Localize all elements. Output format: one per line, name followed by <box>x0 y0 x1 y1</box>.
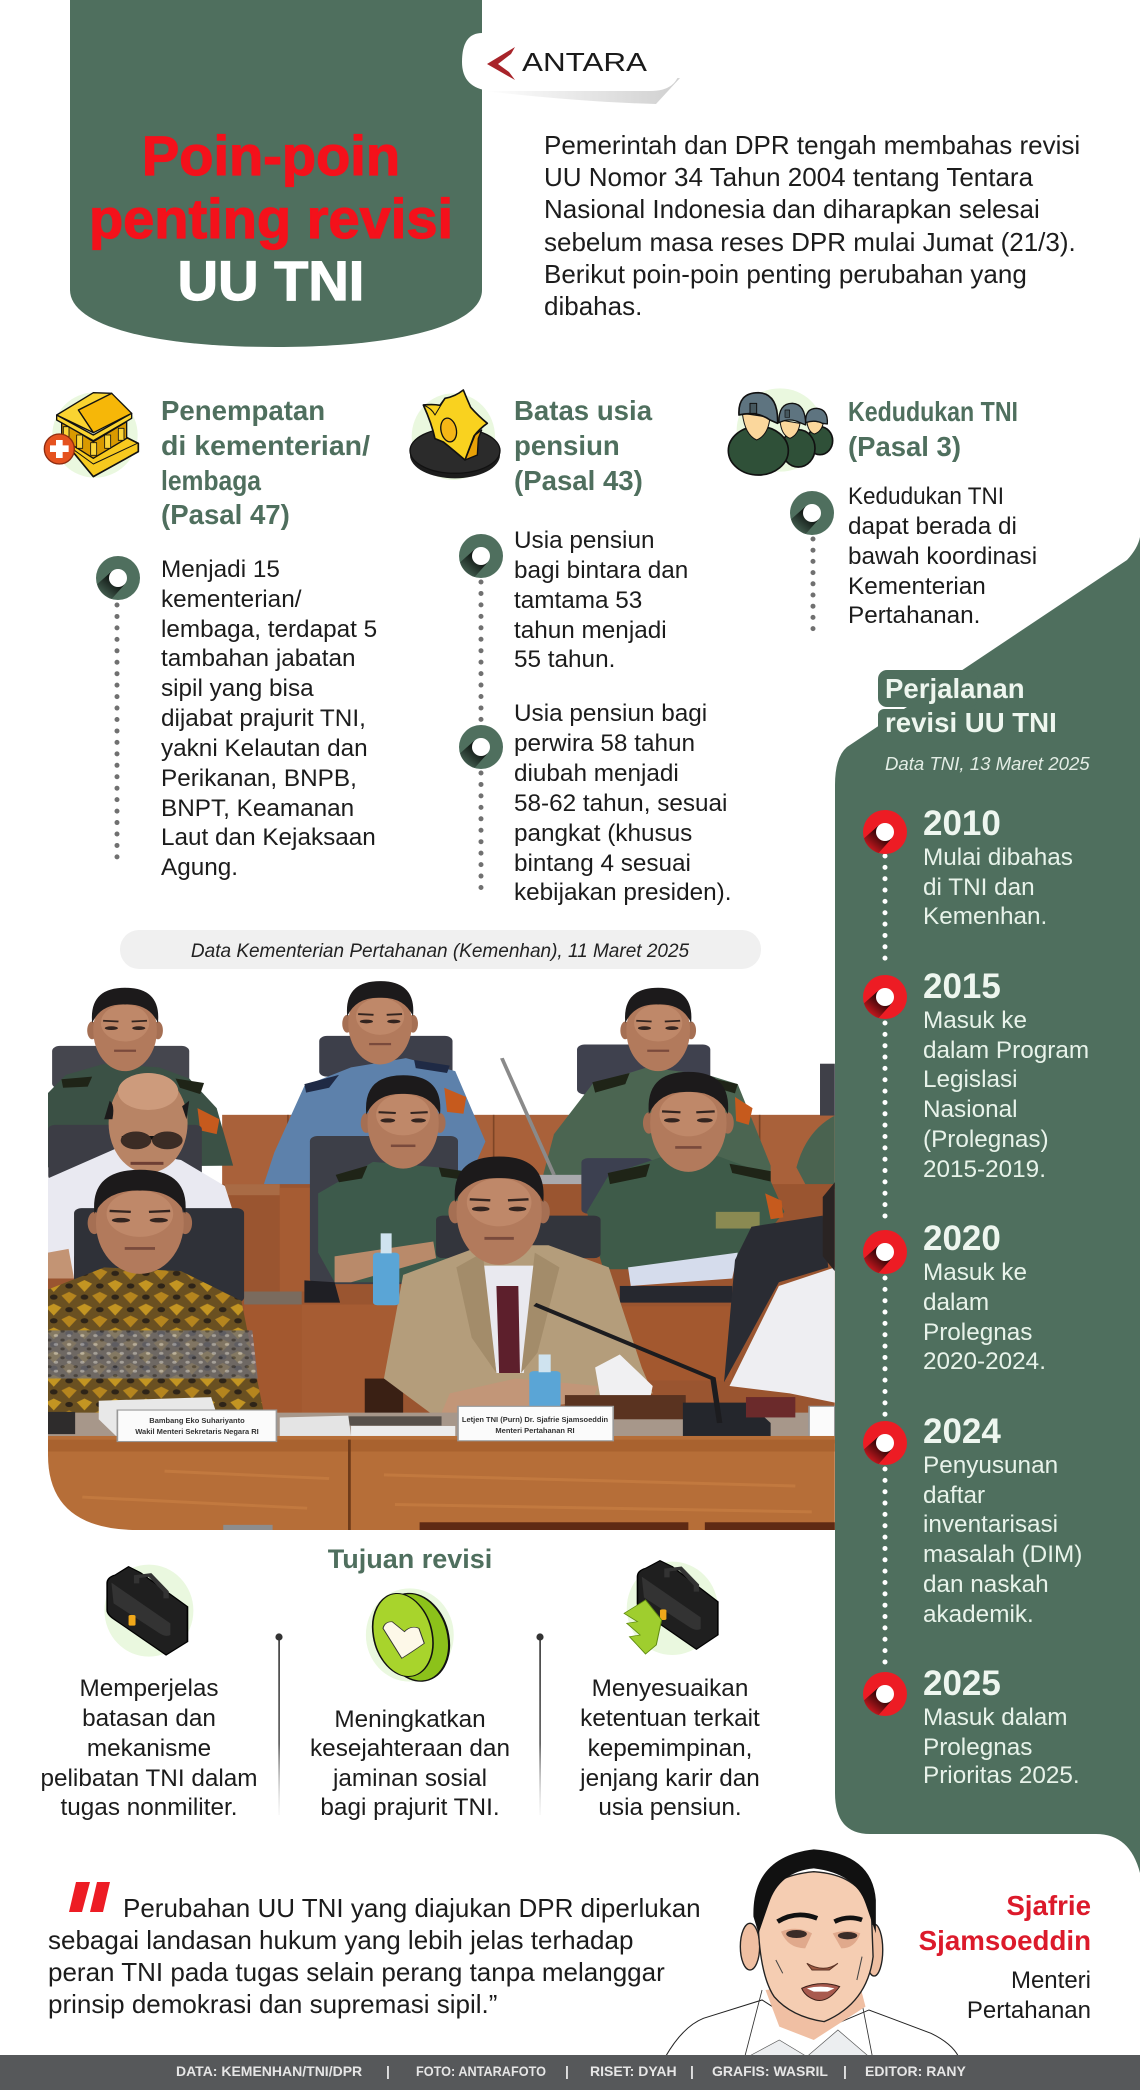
text block: bintara: 55 tahun. <box>514 646 615 673</box>
panel: kedudukan TNI <box>788 396 1037 629</box>
speaker name: Sjafrie <box>1006 1890 1091 1921</box>
heading: penempatan: lembaga <box>161 465 262 496</box>
heading: batas usia <box>514 395 653 496</box>
text block: introduction: dibahas. <box>544 291 642 321</box>
quote: sebagai landasan hukum yang lebih jelas terhadap <box>48 1925 633 1955</box>
text block: perwira: bintang 4 sesuai <box>514 850 691 877</box>
text block: bintara: tahun menjadi <box>514 617 667 644</box>
text block: goal three: usia pensiun. <box>598 1794 742 1821</box>
icon: soldiers <box>728 388 833 475</box>
heading: kedudukan: (Pasal 3) <box>848 431 961 462</box>
text block: introduction: Pemerintah dan DPR tengah membahas revisi <box>544 130 1080 160</box>
name plate left: Wakil Menteri Sekretaris Negara RI <box>135 1427 259 1436</box>
heading: penempatan: Penempatan <box>161 395 325 426</box>
text block: goal two: kesejahteraan dan <box>310 1735 510 1762</box>
item: 2020: Prolegnas <box>923 1319 1032 1346</box>
text block: introduction: UU Nomor 34 Tahun 2004 tentang Tentara <box>544 162 1034 192</box>
item: 2015: dalam Program <box>923 1037 1089 1064</box>
footer credits: DATA: KEMENHAN/TNI/DPR <box>176 2063 362 2079</box>
text block: penempatan body: tambahan jabatan <box>161 645 356 672</box>
text block: penempatan body: Agung. <box>161 854 238 881</box>
photo: hearing <box>48 981 835 1532</box>
item: 2015: Legislasi <box>923 1066 1018 1093</box>
item: 2010: Kemenhan. <box>923 903 1047 930</box>
text block: introduction <box>544 130 1080 321</box>
speaker role: Menteri <box>1011 1967 1091 1994</box>
text block: goal one: batasan dan <box>82 1705 216 1732</box>
heading: batas usia: (Pasal 43) <box>514 465 643 496</box>
item: 2024: daftar <box>923 1482 985 1509</box>
item: 2010: di TNI dan <box>923 874 1035 901</box>
text block: bintara: Usia pensiun <box>514 527 654 554</box>
divider <box>536 1633 544 1815</box>
item: 2025: Masuk dalam <box>923 1704 1068 1731</box>
footer credits: | <box>843 2063 847 2079</box>
text block: kedudukan body: dapat berada di <box>848 513 1017 540</box>
logo: ANTARA: ANTARA <box>522 47 648 77</box>
footer credits: GRAFIS: WASRIL <box>712 2063 828 2079</box>
speaker name: Sjamsoeddin <box>919 1925 1091 1956</box>
text block: penempatan body: Laut dan Kejaksaan <box>161 824 376 851</box>
quote: peran TNI pada tugas selain perang tanpa melanggar <box>48 1957 665 1987</box>
heading: batas usia: Batas usia <box>514 395 653 426</box>
text block: goal three: jenjang karir dan <box>579 1765 760 1792</box>
heading: kedudukan: Kedudukan TNI <box>848 396 1018 427</box>
text block: perwira: diubah menjadi <box>514 760 679 787</box>
quote: Perubahan UU TNI yang diajukan DPR diperlukan <box>123 1893 701 1923</box>
text block: goal two: jaminan sosial <box>332 1765 487 1792</box>
heading: perjalanan: revisi UU TNI <box>885 707 1057 738</box>
item: 2020: 2020 <box>923 1219 1001 1258</box>
text block: goal one: Memperjelas <box>79 1675 219 1702</box>
item: 2010: 2010 <box>923 804 1001 843</box>
item: 2020: 2020-2024. <box>923 1348 1046 1375</box>
item: 2010 <box>861 804 1073 930</box>
heading: title: Poin-poin <box>142 124 400 187</box>
icon: quotation mark <box>69 1882 110 1912</box>
text block: kedudukan body <box>848 483 1037 629</box>
heading: perjalanan <box>885 673 1057 738</box>
divider <box>275 1633 283 1815</box>
text block: penempatan body: BNPT, Keamanan <box>161 795 354 822</box>
text block: penempatan body: lembaga, terdapat 5 <box>161 616 377 643</box>
text block: introduction: Berikut poin-poin penting perubahan yang <box>544 259 1027 289</box>
pill: data source <box>120 930 761 969</box>
name plate left: Bambang Eko Suhariyanto <box>149 1416 245 1425</box>
item: 2024: masalah (DIM) <box>923 1541 1082 1568</box>
text block: introduction: Nasional Indonesia dan diharapkan selesai <box>544 194 1040 224</box>
text block: goal two <box>310 1706 510 1821</box>
item: 2025: 2025 <box>923 1664 1001 1703</box>
text block: penempatan body: Menjadi 15 <box>161 556 280 583</box>
text block: bintara <box>514 527 688 673</box>
footer credits <box>0 2055 1140 2090</box>
text block: goal three: ketentuan terkait <box>580 1705 760 1732</box>
icon: briefcase with key <box>624 1561 718 1655</box>
text block: penempatan body <box>161 556 377 881</box>
text block: goal three: kepemimpinan, <box>588 1735 752 1762</box>
name plate centre <box>462 1416 608 1433</box>
text block: introduction: sebelum masa reses DPR mulai Jumat (21/3). <box>544 227 1076 257</box>
marker <box>457 534 503 580</box>
text block: bintara: tamtama 53 <box>514 587 642 614</box>
text block: perwira: 58-62 tahun, sesuai <box>514 790 727 817</box>
text block: penempatan body: dijabat prajurit TNI, <box>161 705 366 732</box>
text block: kedudukan body: bawah koordinasi <box>848 543 1037 570</box>
text block: goal one: mekanisme <box>87 1735 211 1762</box>
item: 2015: 2015-2019. <box>923 1156 1046 1183</box>
name plate centre: Menteri Pertahanan RI <box>495 1426 575 1435</box>
text block: perwira <box>514 700 731 906</box>
icon: star on black base <box>410 390 500 480</box>
text block: bintara: bagi bintara dan <box>514 557 688 584</box>
text block: goal two: bagi prajurit TNI. <box>320 1794 500 1821</box>
pill: data source: Data Kementerian Pertahanan (Kemenhan), 11 Maret 2025 <box>191 941 690 962</box>
icon: coin with heart <box>366 1588 456 1683</box>
heading: perjalanan: Perjalanan <box>885 673 1025 704</box>
item: 2024: dan naskah <box>923 1571 1049 1598</box>
icon: briefcase <box>104 1565 193 1657</box>
text block: goal one <box>40 1675 258 1821</box>
heading: penempatan <box>161 395 370 530</box>
text block: goal one: pelibatan TNI dalam <box>40 1765 258 1792</box>
heading: penempatan: (Pasal 47) <box>161 499 290 530</box>
panel: title <box>70 0 482 347</box>
text block: penempatan body: kementerian/ <box>161 586 302 613</box>
speaker role <box>967 1967 1091 2024</box>
heading: title: penting revisi <box>89 187 453 250</box>
panel: penempatan di kementerian <box>94 395 377 881</box>
text block: kedudukan body: Kementerian <box>848 573 986 600</box>
marker <box>457 725 503 771</box>
text block: goal three: Menyesuaikan <box>592 1675 748 1702</box>
footer credits: | <box>690 2063 694 2079</box>
heading: title: UU TNI <box>178 249 364 312</box>
text block: goal one: tugas nonmiliter. <box>61 1794 237 1821</box>
footer credits: EDITOR: RANY <box>865 2063 967 2079</box>
panel: batas usia pensiun <box>457 395 731 906</box>
footer credits: | <box>386 2063 390 2079</box>
portrait: Sjafrie <box>666 1849 959 2057</box>
footer credits: RISET: DYAH <box>590 2063 677 2079</box>
name plate centre: Letjen TNI (Purn) Dr. Sjafrie Sjamsoeddin <box>462 1415 609 1424</box>
text block: goal three <box>579 1675 760 1821</box>
item: 2020 <box>861 1219 1046 1375</box>
item: 2020: dalam <box>923 1289 989 1316</box>
text block: kedudukan body: Pertahanan. <box>848 602 980 629</box>
item: 2024: Penyusunan <box>923 1452 1058 1479</box>
item: 2015: Nasional <box>923 1096 1018 1123</box>
item: 2024 <box>861 1412 1082 1628</box>
text block: penempatan body: yakni Kelautan dan <box>161 735 368 762</box>
text block: penempatan body: sipil yang bisa <box>161 675 314 702</box>
heading: penempatan: di kementerian/ <box>161 430 370 461</box>
text block: goal two: Meningkatkan <box>334 1706 486 1733</box>
item: 2015: (Prolegnas) <box>923 1126 1049 1153</box>
text block: perwira: perwira 58 tahun <box>514 730 695 757</box>
footer credits: | <box>565 2063 569 2079</box>
item: 2010: Mulai dibahas <box>923 844 1073 871</box>
item: 2020: Masuk ke <box>923 1259 1027 1286</box>
source: data TNI: Data TNI, 13 Maret 2025 <box>885 753 1090 774</box>
item: 2024: inventarisasi <box>923 1511 1058 1538</box>
logo: ANTARA <box>462 33 680 104</box>
heading: tujuan revisi: Tujuan revisi <box>328 1544 492 1574</box>
item: 2024: akademik. <box>923 1601 1034 1628</box>
item: 2015 <box>861 967 1089 1183</box>
name plate left <box>135 1418 258 1436</box>
speaker role: Pertahanan <box>967 1997 1091 2024</box>
panel: perjalanan revisi <box>835 537 1140 1873</box>
text block: perwira: kebijakan presiden). <box>514 879 731 906</box>
icon: government building <box>44 392 138 478</box>
heading: title <box>89 124 453 312</box>
quote <box>48 1893 701 2019</box>
text block: penempatan body: Perikanan, BNPB, <box>161 765 357 792</box>
item: 2024: 2024 <box>923 1412 1001 1451</box>
text block: perwira: pangkat (khusus <box>514 820 692 847</box>
quote: prinsip demokrasi dan supremasi sipil.” <box>48 1989 497 2019</box>
item: 2015: 2015 <box>923 967 1001 1006</box>
heading: kedudukan <box>848 396 1018 462</box>
item: 2025: Prioritas 2025. <box>923 1762 1080 1789</box>
item: 2015: Masuk ke <box>923 1007 1027 1034</box>
text block: kedudukan body: Kedudukan TNI <box>848 483 1004 510</box>
footer credits: FOTO: ANTARAFOTO <box>416 2063 546 2079</box>
speaker name <box>919 1890 1091 1956</box>
item: 2025 <box>861 1664 1080 1789</box>
marker <box>788 491 834 537</box>
heading: batas usia: pensiun <box>514 430 620 461</box>
item: 2025: Prolegnas <box>923 1734 1032 1761</box>
text block: perwira: Usia pensiun bagi <box>514 700 707 727</box>
marker <box>94 556 140 602</box>
